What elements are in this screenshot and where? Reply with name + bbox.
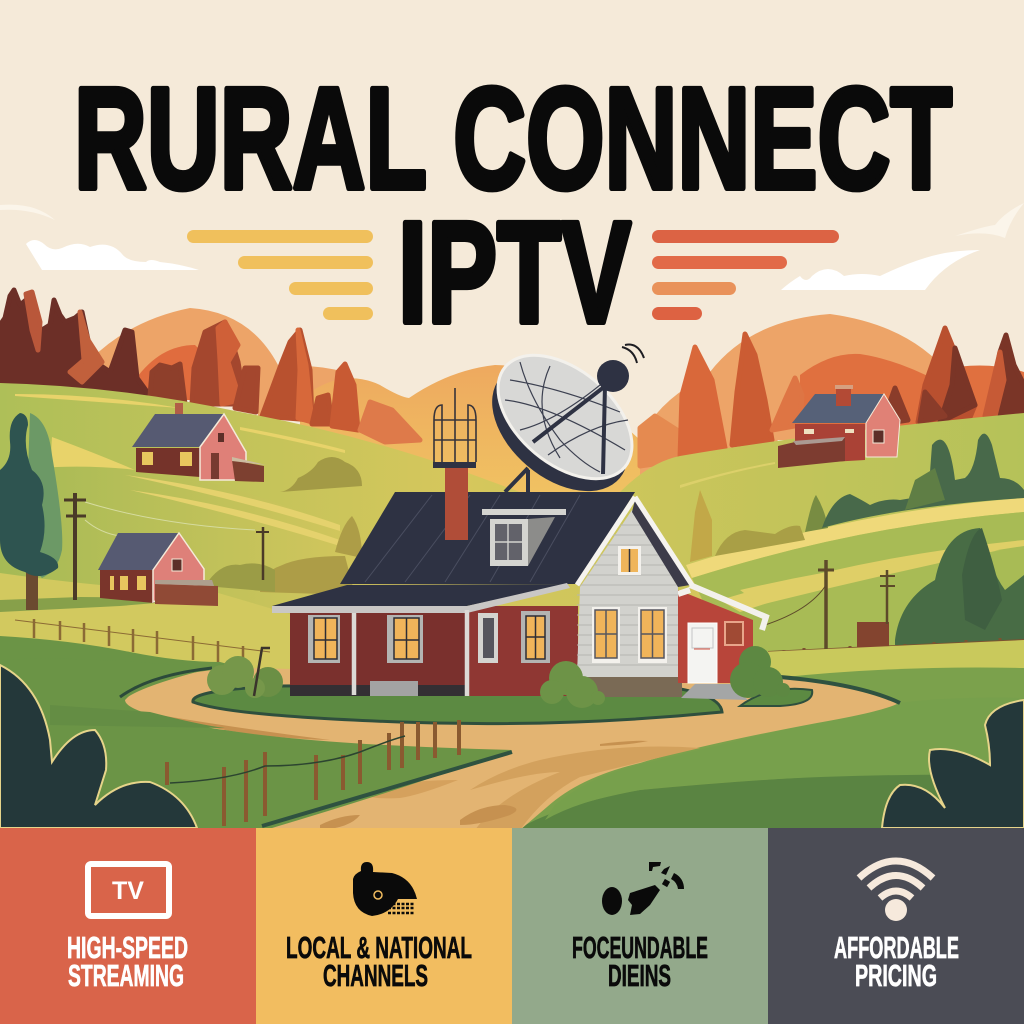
front steps <box>370 681 418 696</box>
yellow ribbon <box>686 498 1024 578</box>
treeline right <box>640 328 1024 466</box>
utility pole left <box>64 493 269 600</box>
left lower field front <box>0 659 512 830</box>
label line: high-speed: HIGH-SPEED <box>67 930 188 965</box>
feed arms <box>533 380 613 474</box>
road shade patches <box>165 716 648 830</box>
treeline left <box>0 290 420 442</box>
gable siding <box>577 525 678 665</box>
road edge front <box>262 752 512 826</box>
label line: dieins: DIEINS <box>608 958 671 993</box>
panel: local and national channels <box>256 828 512 1024</box>
label line: local and national: LOCAL & NATIONAL <box>286 930 472 965</box>
left lower band <box>0 573 310 700</box>
signal bars left <box>187 230 373 320</box>
dish face <box>475 331 655 503</box>
trees right cluster <box>895 528 1024 645</box>
dormer <box>482 509 566 566</box>
dark bush bottom right <box>882 700 1024 828</box>
panel: high-speed streaming <box>0 828 256 1024</box>
windows <box>308 607 667 663</box>
front door <box>688 623 717 683</box>
chimney cap <box>433 462 476 468</box>
wall centre <box>468 606 578 696</box>
central lawn <box>193 684 722 724</box>
panel: affordable pricing <box>768 828 1024 1024</box>
gable trim <box>577 497 692 585</box>
porch fascia <box>272 583 570 613</box>
chimney <box>445 468 468 540</box>
left field <box>0 636 290 830</box>
farmhouse bottom left <box>98 533 218 606</box>
foundation <box>290 683 468 696</box>
dish legs <box>505 468 528 492</box>
main roof <box>340 492 635 584</box>
porch roof <box>272 584 568 606</box>
utility poles right <box>765 560 895 674</box>
dish back shell <box>468 340 652 516</box>
feed horn <box>597 360 629 392</box>
label line: pricing: PRICING <box>855 958 937 993</box>
hill highlights <box>15 394 775 488</box>
roof seams <box>365 495 580 582</box>
wall left <box>290 613 468 685</box>
right lawn <box>740 689 812 706</box>
panel: foceundable dieins <box>512 828 768 1024</box>
porch steps <box>681 684 748 700</box>
gable roof shadow <box>632 500 690 587</box>
icon: wifi <box>859 861 933 921</box>
window top gable <box>618 546 641 575</box>
light lower field right <box>545 698 1024 820</box>
title <box>74 58 952 353</box>
shrub centre <box>540 661 605 708</box>
wall right wing <box>678 590 753 683</box>
satellite dish <box>468 331 655 516</box>
road darker band <box>470 746 700 830</box>
shrub left of house <box>207 656 283 698</box>
icon text: tv: TV <box>112 877 144 905</box>
fence right <box>768 638 1024 676</box>
small side window <box>725 622 743 645</box>
road edge right <box>780 677 900 703</box>
signal arcs <box>622 345 644 363</box>
rolling hill far <box>0 383 1024 700</box>
right ribbons <box>720 540 1024 612</box>
fence left <box>15 619 270 668</box>
background bushes left <box>205 457 362 595</box>
farmhouse top left <box>132 403 266 482</box>
yellow meadow right <box>760 640 1024 682</box>
label line: streaming: STREAMING <box>68 958 184 993</box>
signal bars right <box>652 230 839 320</box>
main house <box>272 388 766 700</box>
foundation stone <box>572 677 682 697</box>
left hill strips <box>125 475 340 546</box>
dark bush bottom left <box>0 665 197 828</box>
dark lower field right <box>520 772 1024 830</box>
icon: channels <box>353 862 417 916</box>
fence front <box>167 720 459 826</box>
right wing roof <box>678 585 766 630</box>
background bushes right <box>690 434 1024 562</box>
farmhouse top right <box>778 385 900 468</box>
distant sun hills <box>90 308 1024 510</box>
icon: broadcast figure <box>602 862 684 915</box>
sign post <box>254 648 270 696</box>
utility shed right <box>857 622 889 658</box>
gable wall <box>577 510 678 677</box>
clouds <box>0 203 1024 290</box>
field right bank <box>692 512 1024 680</box>
porch post and downpipe <box>354 610 467 696</box>
road edge left <box>120 668 212 697</box>
title: IPTV <box>398 192 631 353</box>
lawn right <box>520 667 1024 830</box>
label line: channels: CHANNELS <box>323 958 428 993</box>
dirt road <box>125 668 897 830</box>
hill shadow band <box>0 597 215 612</box>
dish grid <box>505 362 628 472</box>
shrub right <box>730 646 790 698</box>
icon: tv <box>88 864 169 916</box>
rooftop antenna cage <box>434 388 476 462</box>
mid hill with ribbon <box>0 467 1024 700</box>
left field dark strip <box>50 705 225 728</box>
tree left <box>0 413 62 610</box>
label line: foceundable: FOCEUNDABLE <box>572 930 708 965</box>
